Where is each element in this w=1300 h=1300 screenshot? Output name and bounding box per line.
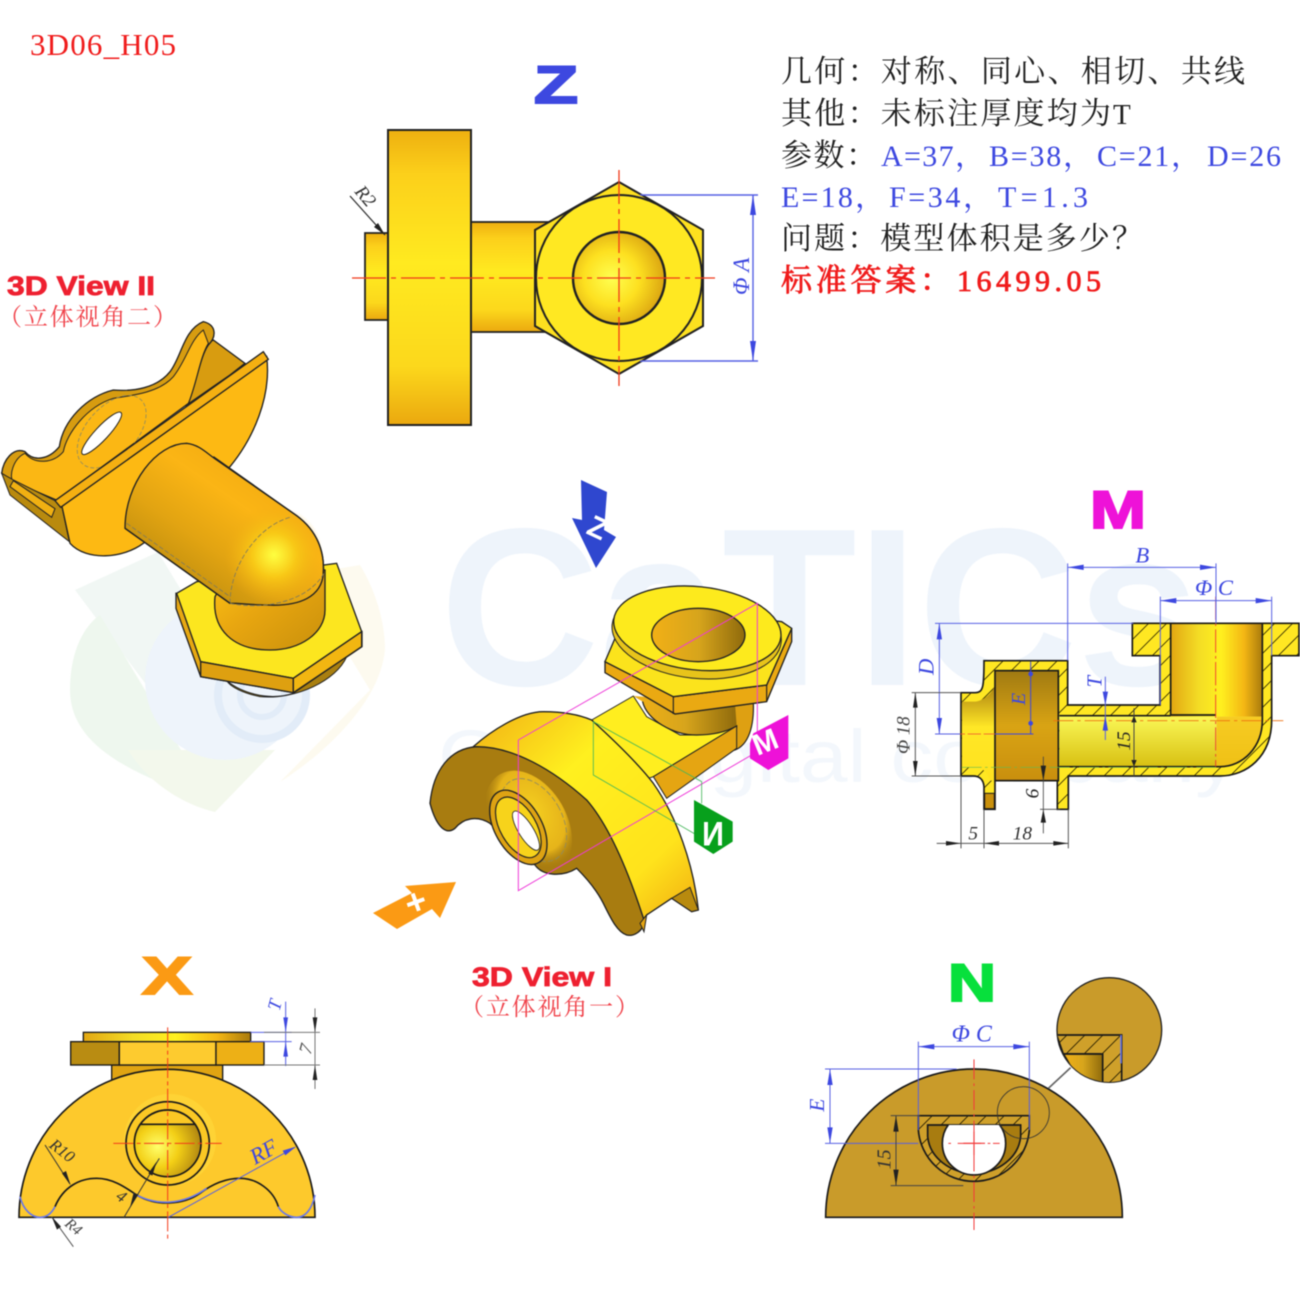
parameters line 1: B=38，: [989, 140, 1093, 173]
parameters line 2: E=18，: [781, 181, 885, 214]
pipe top surface: [587, 696, 737, 783]
elbow bowl: [633, 696, 737, 735]
boss ring: [126, 1102, 209, 1185]
elbow outer: [643, 702, 753, 750]
hole: [77, 408, 126, 459]
vertical bore: [1171, 623, 1262, 717]
slot: [10, 481, 55, 517]
label Z arrow: Z: [582, 509, 613, 547]
section wall: [918, 1116, 1029, 1181]
inner wave: [55, 1178, 278, 1207]
label Z: Z: [534, 56, 578, 115]
wavy rim: [2, 322, 214, 500]
label X: X: [142, 947, 192, 1006]
dimension 18 dia: Φ 18: [893, 716, 914, 754]
dimension A: Φ A: [729, 257, 754, 295]
view II: isometric model back: [2, 322, 362, 697]
detail leader: [1048, 1068, 1071, 1088]
nut middle: [119, 1042, 216, 1065]
dimension A: [640, 195, 758, 361]
dimension C: [918, 1022, 1029, 1130]
dimension 15: 15: [874, 1149, 896, 1169]
bottom dimensions: [937, 776, 1068, 848]
parameters line 1: [781, 138, 1281, 173]
pipe bore: [1059, 623, 1262, 767]
fillet around hole: [467, 755, 590, 892]
dimension 4: 4: [113, 1186, 130, 1206]
dimension 6: [1023, 757, 1060, 833]
dimension E: E: [1008, 693, 1030, 706]
label 3D View II: （立体视角二）: [0, 304, 177, 331]
boss: [478, 780, 559, 874]
answer line: [781, 263, 1101, 298]
pipe: [125, 443, 323, 605]
hexagon nut: [535, 182, 703, 374]
dimension R4: [52, 1214, 86, 1247]
cavity: [928, 1125, 1021, 1173]
label 3D View II: [0, 271, 177, 331]
title code: 3D06_H05: [30, 27, 176, 62]
bore: [573, 232, 665, 324]
center lines: [352, 170, 715, 386]
rear strip: [187, 340, 245, 405]
answer line: 标准答案：: [781, 263, 951, 298]
flange: [388, 130, 471, 425]
green section N: [593, 722, 702, 835]
magnified detail: [1057, 978, 1162, 1083]
half disc: [19, 1069, 315, 1217]
answer line: 16499.05: [957, 265, 1101, 298]
watermark: pale logo: [70, 552, 385, 812]
corner arcs: [20, 1195, 315, 1217]
dimension T: T: [1085, 674, 1107, 687]
dimension 15: 15: [1114, 731, 1135, 751]
tag N: N: [702, 815, 724, 853]
dimension B: B: [1135, 543, 1149, 568]
dimension 4: [113, 1158, 159, 1217]
nut right: [216, 1042, 264, 1065]
dimension 18 dia: [893, 693, 961, 776]
other line: 其他：未标注厚度均为: [781, 96, 1111, 131]
problem text block: [781, 54, 1281, 298]
dimension 7: 7: [295, 1041, 318, 1056]
dimension 6: 6: [1023, 788, 1044, 798]
label X arrow: [373, 879, 456, 929]
dimension R4: R4: [61, 1214, 86, 1239]
small boss: [365, 233, 388, 320]
question line: 问题：模型体积是多少？: [781, 221, 1143, 256]
label Z arrow: [572, 480, 616, 568]
dimension C: Φ C: [952, 1022, 993, 1048]
label 3D View I: [460, 962, 639, 1021]
lower rim: [2, 473, 69, 542]
nut side: [605, 628, 792, 714]
outer circle: [536, 195, 702, 361]
label 3D View I: （立体视角一）: [460, 994, 639, 1021]
tangent edges: [127, 517, 324, 606]
watermark: CAD digital text: CAD digital company: [438, 715, 1238, 798]
nut left: [71, 1042, 119, 1065]
dimension D: [913, 623, 1133, 734]
parameters line 2: T=1.3: [998, 181, 1088, 214]
rim band: [473, 712, 698, 923]
dimension E: E: [805, 1099, 829, 1113]
parameters line 1: C=21，: [1097, 140, 1201, 173]
label X arrow: +: [399, 879, 432, 925]
dimension RF: [168, 1134, 296, 1217]
center lines: [113, 1027, 222, 1241]
dimension R2: [350, 181, 385, 235]
detail circle: [997, 1087, 1049, 1139]
hex side front: [201, 662, 293, 693]
ball highlight: [225, 506, 323, 604]
bottom dimensions: 5: [968, 823, 978, 844]
tag M: [748, 715, 788, 770]
label N: N: [948, 954, 996, 1013]
hex side: [176, 593, 362, 693]
parameters line 1: D=26: [1207, 140, 1281, 173]
center lines: [972, 1059, 975, 1230]
fillet glow: [124, 1094, 216, 1186]
dimension B: [1068, 543, 1216, 661]
main half disc: [62, 357, 267, 556]
magenta section M: [518, 603, 757, 891]
dimension 15: [874, 1116, 963, 1186]
watermark: CaTICs text: CaTICs: [440, 481, 1200, 733]
front face: [430, 747, 644, 935]
dimension R2: R2: [350, 181, 380, 212]
foot small: [985, 793, 994, 809]
bottom ring: [227, 657, 347, 697]
dimension R10: [45, 1134, 79, 1185]
hex face: [177, 563, 362, 678]
neck: [112, 1065, 223, 1082]
parameters line 1: 参数：: [781, 138, 877, 173]
arm: [471, 222, 551, 332]
tag N: [694, 800, 733, 854]
dimension RF: RF: [244, 1134, 283, 1170]
bore: [940, 1124, 1008, 1176]
foot tip: [640, 915, 647, 932]
flange bore: [652, 608, 745, 662]
half disc: [826, 1069, 1122, 1217]
flange: [607, 580, 786, 687]
view N: section: [805, 978, 1162, 1230]
neck bore: [962, 683, 995, 781]
other line: T: [1113, 99, 1131, 131]
notch: [672, 887, 698, 912]
parameters line 2: [781, 181, 1088, 214]
dimension C: [1160, 575, 1272, 705]
tag M: M: [748, 723, 783, 762]
dimension R10: R10: [45, 1134, 79, 1167]
bore top: [140, 1110, 195, 1124]
rim inner face: [11, 330, 208, 500]
view I: isometric model: [430, 578, 792, 935]
dimension T: [250, 996, 292, 1066]
nut top: [605, 603, 792, 697]
dimension 7: [264, 1008, 320, 1089]
view M: section: [893, 543, 1299, 848]
chamber: [995, 671, 1058, 781]
flange: [83, 1032, 251, 1042]
label M: M: [1090, 481, 1146, 540]
dimension C: Φ C: [1195, 575, 1234, 600]
view Z: top view: [350, 130, 758, 425]
hole opening: [508, 808, 544, 854]
section wall: [961, 623, 1299, 809]
dimension E: [805, 1069, 957, 1143]
center lines: [1053, 719, 1283, 722]
bore: [134, 1110, 201, 1177]
dimension T: T: [264, 996, 287, 1013]
view X: front view: [19, 996, 320, 1247]
label 3D View II: 3D View II: [7, 271, 155, 301]
top strip: [55, 352, 268, 507]
parameters line 2: F=34，: [889, 181, 993, 214]
bottom dimensions: 18: [1013, 823, 1032, 844]
geometry line: 几何：对称、同心、相切、共线: [781, 54, 1245, 89]
dimension T: [1085, 674, 1108, 740]
label 3D View I: 3D View I: [472, 962, 612, 992]
elbow lower: [215, 563, 325, 650]
parameters line 1: A=37，: [881, 140, 985, 173]
pipe dark band: [653, 726, 737, 798]
dimension D: D: [913, 658, 938, 676]
dimension E: [995, 662, 1033, 734]
dimension 15: [1114, 708, 1137, 776]
hole fillet: [64, 383, 159, 481]
